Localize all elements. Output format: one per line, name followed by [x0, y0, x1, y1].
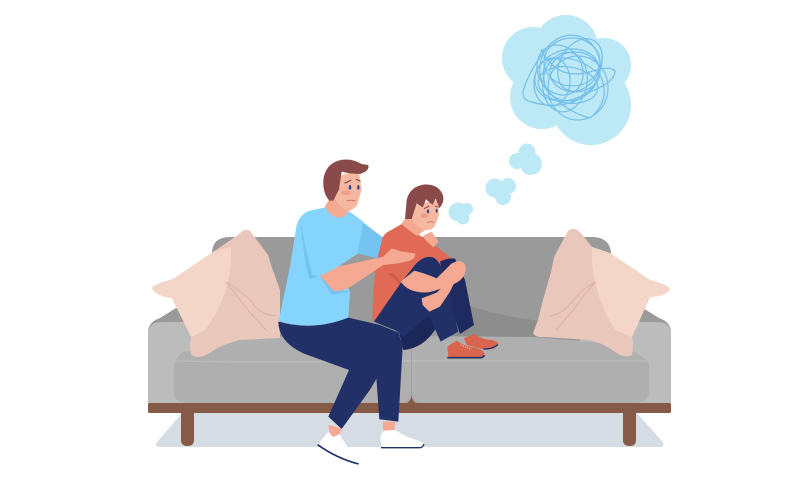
man eyebrows: [345, 179, 361, 183]
small thought bubble 3: [509, 144, 542, 175]
left armrest: [148, 308, 250, 403]
boy near shoe: [447, 341, 485, 358]
small thought bubble 1: [448, 202, 473, 224]
left sofa leg: [181, 413, 194, 446]
right armrest: [570, 308, 671, 403]
boy butt shadow: [398, 307, 436, 350]
boy shirt: [373, 224, 453, 322]
man eyes: [349, 185, 351, 190]
boy cheek: [420, 213, 428, 218]
tangled scribble: [523, 28, 615, 120]
boy shirt fold: [387, 273, 401, 285]
boy hair: [405, 184, 443, 219]
boy hand on shoulder: [423, 232, 438, 247]
man mouth: [347, 199, 355, 202]
boy far shin: [440, 258, 474, 334]
backrest shadow: [440, 306, 540, 345]
boy eyebrows: [424, 206, 439, 209]
man near leg: [278, 318, 398, 429]
left seat cushion: [174, 336, 411, 403]
large thought cloud: [502, 15, 631, 145]
boy thigh and near shin: [374, 257, 458, 342]
boy arm: [401, 261, 466, 293]
man far leg: [367, 330, 403, 422]
right pillow: [533, 229, 670, 356]
man far shoe: [380, 430, 424, 448]
seat filler: [240, 340, 580, 404]
small thought bubble 2: [486, 178, 516, 205]
sofa base: [148, 403, 671, 413]
sofa: [148, 237, 671, 446]
boy face: [412, 200, 439, 230]
floor shadow: [156, 413, 663, 447]
sofa backrest: [212, 237, 611, 345]
boy eyes: [427, 209, 429, 213]
man cheek: [341, 190, 351, 195]
man sleeve fold: [301, 220, 350, 295]
right sofa leg: [623, 413, 636, 446]
man arm and hand: [320, 248, 415, 291]
man shirt: [279, 207, 363, 326]
left pillow: [152, 230, 280, 357]
man ankles: [328, 422, 395, 438]
right seat cushion: [412, 336, 649, 403]
boy lower hand: [422, 282, 454, 312]
man far sleeve: [357, 220, 383, 258]
man: [278, 160, 424, 464]
boy neck: [401, 215, 425, 236]
boy mouth: [427, 220, 434, 224]
boy far shoe: [464, 334, 498, 349]
figures: [278, 160, 498, 464]
man hair: [323, 160, 368, 201]
man near shoe: [318, 432, 359, 464]
man face: [334, 169, 362, 211]
boy: [373, 184, 498, 358]
man neck: [325, 192, 350, 219]
